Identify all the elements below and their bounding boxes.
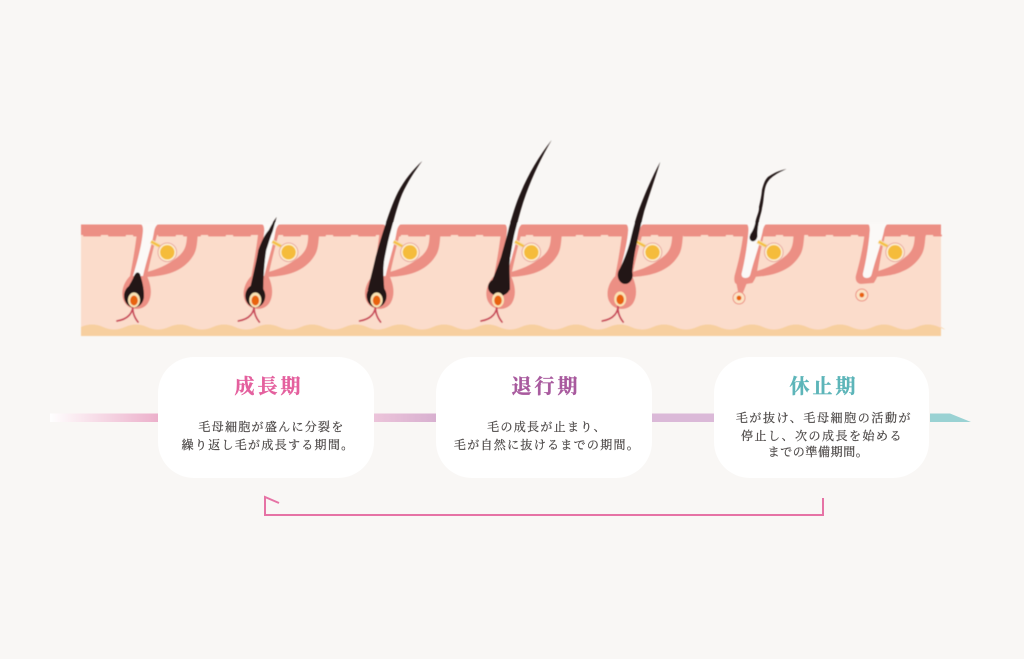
text block: 毛の成長が止まり、 (487, 419, 607, 434)
cycle return arrow (265, 497, 823, 515)
text block (736, 410, 912, 459)
text block: までの準備期間。 (768, 444, 868, 459)
text block: 繰り返し毛が成長する期間。 (182, 437, 354, 452)
follicle 5: catagen (602, 162, 683, 322)
timeline bar (50, 414, 971, 422)
text block: 停止し、次の成長を始める (741, 428, 903, 443)
hair (489, 140, 552, 290)
follicle 4: longest hair (481, 140, 562, 322)
hair (368, 161, 422, 292)
text block: 毛が自然に抜けるまでの期間。 (454, 437, 640, 452)
heading: 成長期 (234, 375, 304, 398)
panel: anagen (158, 357, 374, 478)
subcutaneous fat layer (81, 324, 945, 336)
panel: catagen (436, 357, 652, 478)
follicle 1: early anagen (117, 223, 198, 322)
heading: 退行期 (512, 375, 580, 398)
follicle 2: growing short hair (238, 217, 319, 322)
epidermis layer (81, 224, 941, 236)
dormant papilla (856, 289, 868, 301)
skin cross-section diagram (81, 140, 945, 336)
text block (454, 419, 640, 452)
hair (618, 162, 660, 272)
hair (125, 272, 144, 296)
hair (249, 217, 277, 292)
dormant papilla (733, 292, 745, 304)
arrow head (930, 414, 971, 422)
follicle 7: telogen empty (856, 223, 926, 301)
heading: 休止期 (790, 375, 858, 398)
text block: 毛母細胞が盛んに分裂を (198, 419, 345, 434)
follicle 3: long hair (360, 161, 441, 322)
follicle 6: shedding hair (733, 169, 804, 304)
panel: telogen (714, 357, 929, 478)
dermis layer (81, 226, 941, 334)
text block: 毛が抜け、毛母細胞の活動が (736, 410, 912, 425)
text block (182, 419, 354, 452)
hair (750, 169, 786, 241)
